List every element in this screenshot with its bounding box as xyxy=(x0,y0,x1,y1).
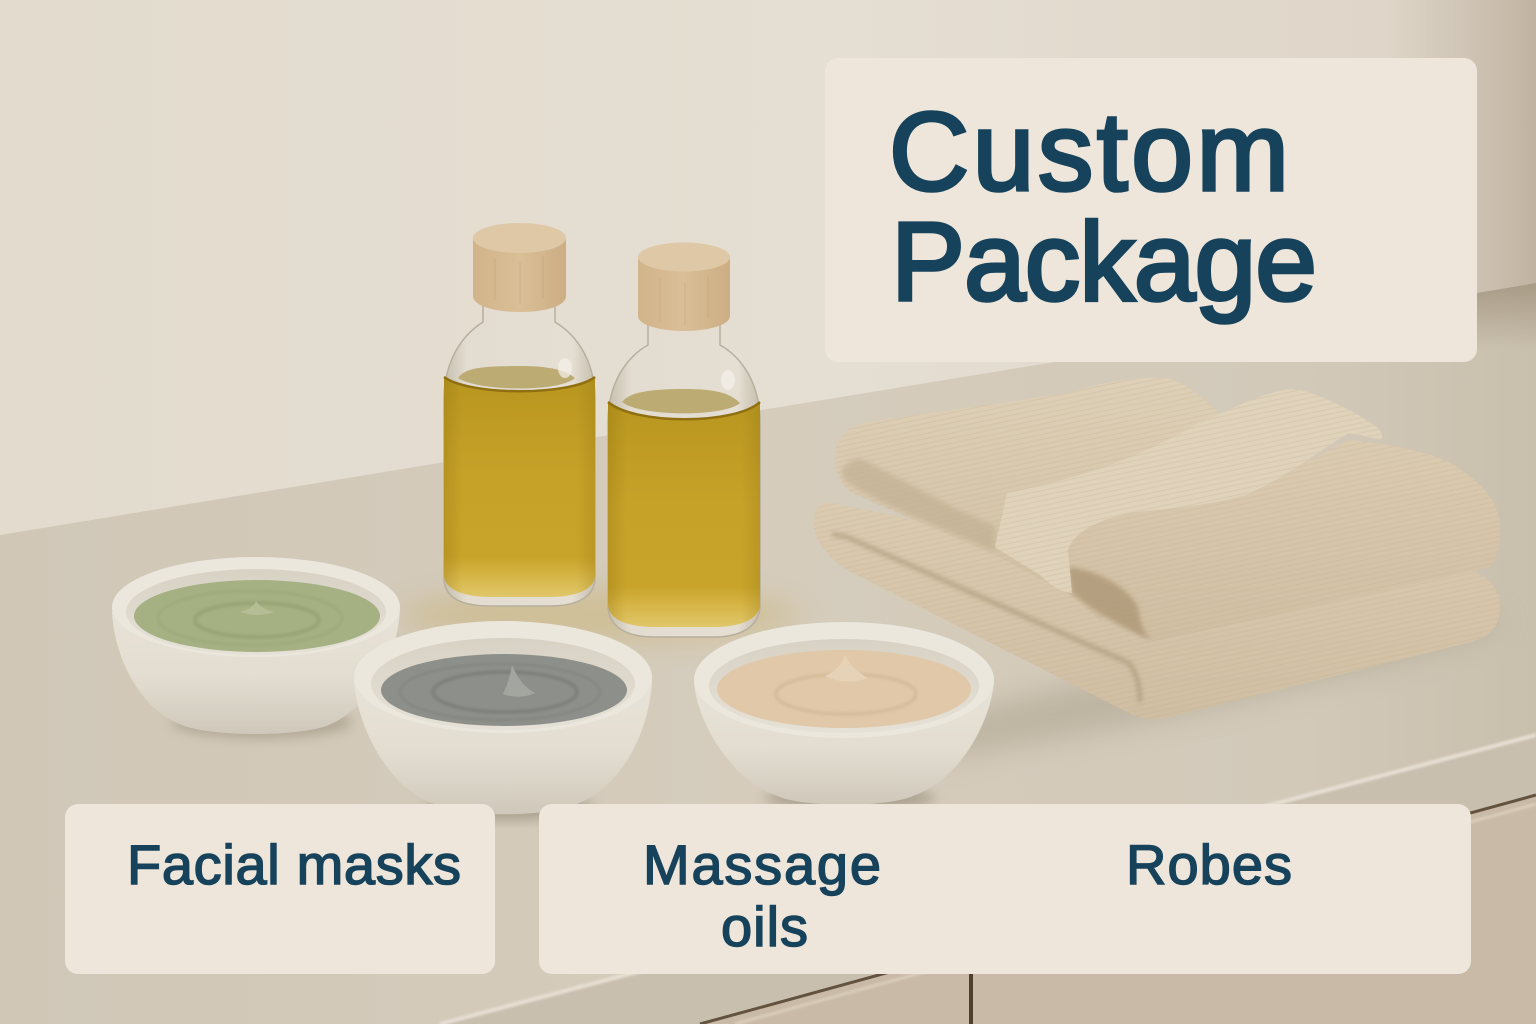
label: robes: Robes xyxy=(1126,833,1292,896)
label: massage oils: oils xyxy=(721,895,808,958)
lower fold xyxy=(814,502,1500,719)
upper back fold xyxy=(835,378,1300,620)
label panel: facial masks: Facial masks xyxy=(127,833,461,896)
title panel xyxy=(825,58,1477,362)
icon: right oil bottle xyxy=(608,242,760,637)
icon: green mask bowl xyxy=(112,557,400,738)
label: massage oils xyxy=(643,833,881,958)
background: countertop and cabinet xyxy=(0,283,1536,1024)
title line 2: Package xyxy=(891,200,1317,324)
icon: beige mask bowl xyxy=(694,622,994,810)
title: Custom xyxy=(889,90,1289,214)
icon: left oil bottle xyxy=(444,223,595,606)
icon: grey mask bowl xyxy=(354,621,652,820)
shadow: golden oil glow xyxy=(400,589,800,641)
collar band xyxy=(995,389,1382,593)
label panel: facial masks xyxy=(65,804,495,974)
label panel: massage oils and robes xyxy=(539,804,1471,974)
right body fold xyxy=(1068,440,1500,640)
icon: folded robes xyxy=(814,378,1508,786)
label: massage oils: Massage xyxy=(643,833,881,896)
